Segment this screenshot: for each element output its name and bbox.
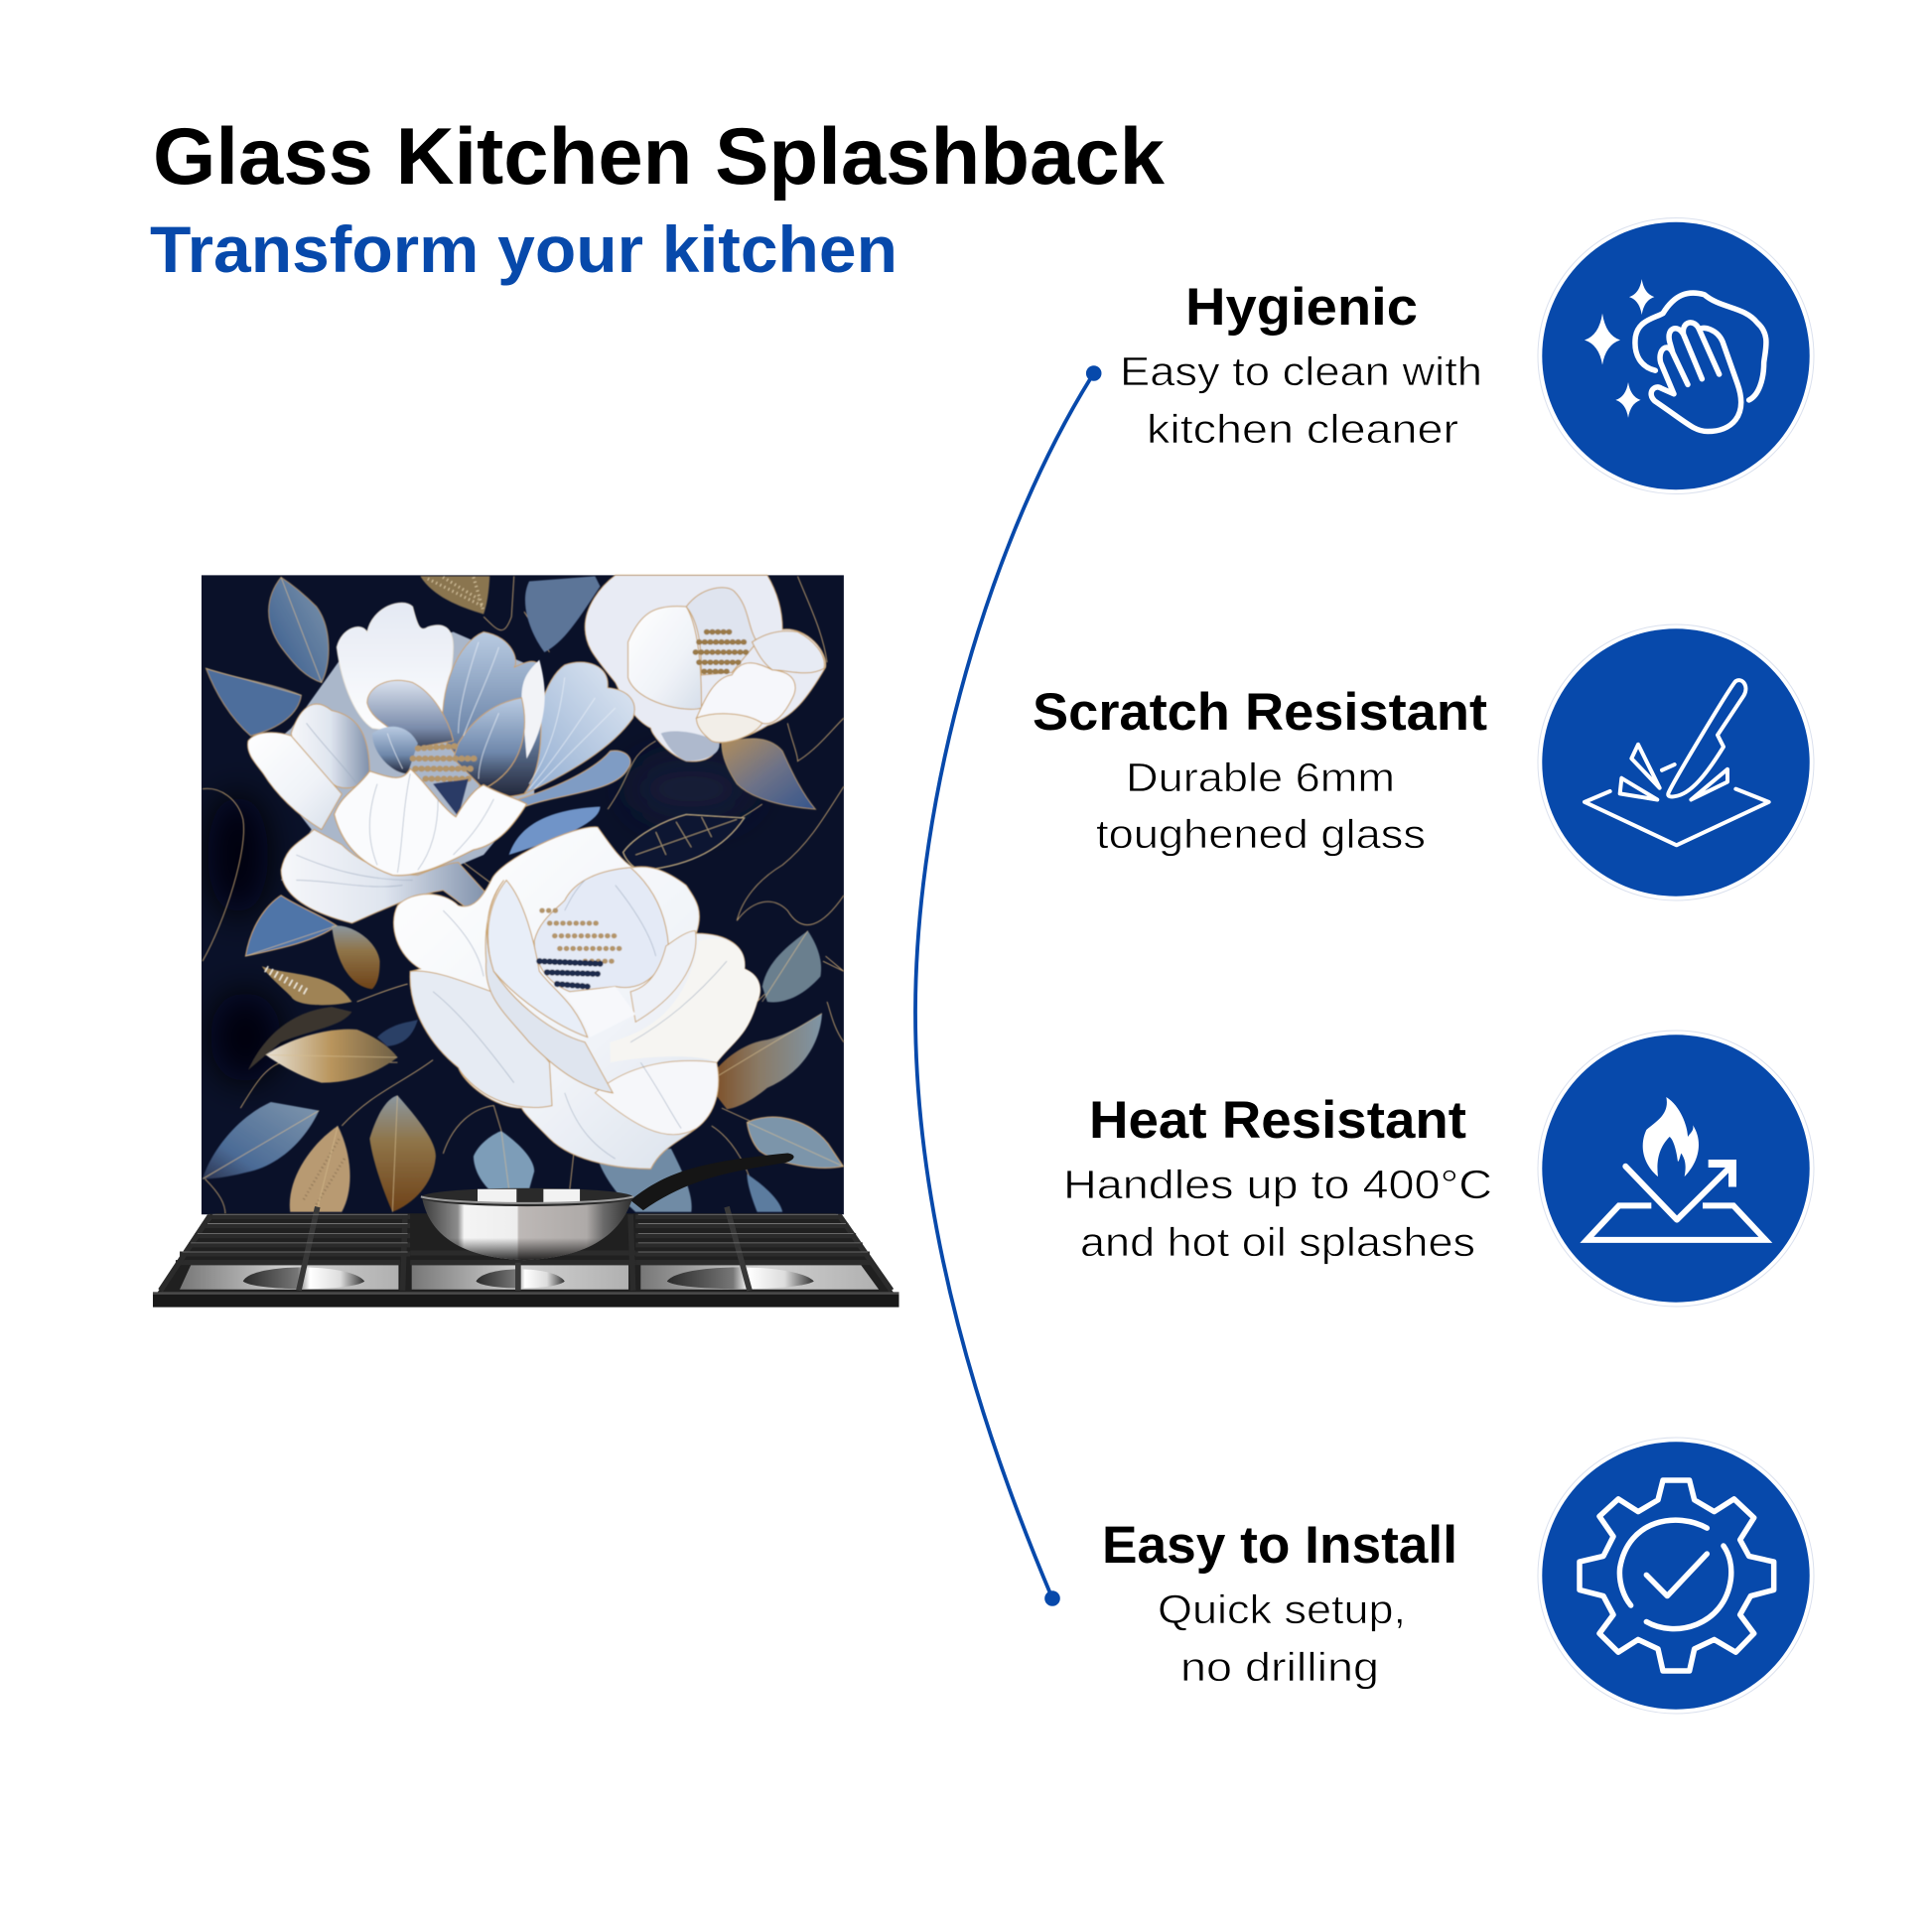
feature text: Scratch Resistant xyxy=(1033,683,1487,857)
gas hob xyxy=(153,1207,899,1308)
feature text: Scratch Resistant: Durable 6mm xyxy=(1126,755,1395,800)
flower underlay xyxy=(256,632,534,910)
icon: flame on heat-reflecting surface xyxy=(1538,1031,1814,1307)
title: Glass Kitchen Splashback xyxy=(153,112,1166,202)
feature text: Scratch Resistant: toughened glass xyxy=(1096,811,1426,857)
feature text: Heat Resistant: Handles up to 400°C xyxy=(1063,1162,1492,1207)
flower: large lower xyxy=(393,827,760,1169)
feature text: Heat Resistant: and hot oil splashes xyxy=(1080,1219,1475,1265)
front edge xyxy=(153,1293,899,1308)
frying pan xyxy=(421,1154,794,1260)
burner wells xyxy=(180,1265,879,1290)
feature text: Hygienic: kitchen cleaner xyxy=(1147,406,1458,452)
flower: upper right xyxy=(585,575,826,761)
grate highlights xyxy=(183,1214,868,1252)
feature text: Heat Resistant xyxy=(1063,1091,1492,1265)
connector curve with end dots xyxy=(915,365,1101,1606)
painted artwork xyxy=(203,575,844,1214)
icon: knife scratching glass xyxy=(1538,624,1814,900)
product illustration: floral splashback above gas hob xyxy=(153,575,899,1308)
panel background xyxy=(202,575,844,1214)
flower: upper left xyxy=(247,603,634,923)
feature text: Hygienic: Hygienic xyxy=(1185,278,1418,337)
grate bars xyxy=(161,1207,892,1291)
feature text: Easy to Install xyxy=(1102,1516,1457,1690)
feature text: Easy to Install: Quick setup, xyxy=(1158,1587,1406,1632)
feature text: Hygienic xyxy=(1120,278,1482,452)
icon: hand wiping with sparkles xyxy=(1538,218,1814,494)
burners xyxy=(243,1267,814,1289)
feature text: Scratch Resistant: Scratch Resistant xyxy=(1033,683,1487,742)
thin gold stems xyxy=(203,576,844,1214)
feature text: Hygienic: Easy to clean with xyxy=(1120,348,1482,394)
leaves xyxy=(203,576,843,1212)
feature text: Easy to Install: no drilling xyxy=(1180,1644,1379,1690)
feature text: Heat Resistant: Heat Resistant xyxy=(1089,1091,1466,1150)
icon: gear with check mark xyxy=(1538,1438,1814,1714)
dark haze patches xyxy=(207,759,753,1083)
feature text: Easy to Install: Easy to Install xyxy=(1102,1516,1457,1575)
subtitle: Transform your kitchen xyxy=(150,212,897,286)
